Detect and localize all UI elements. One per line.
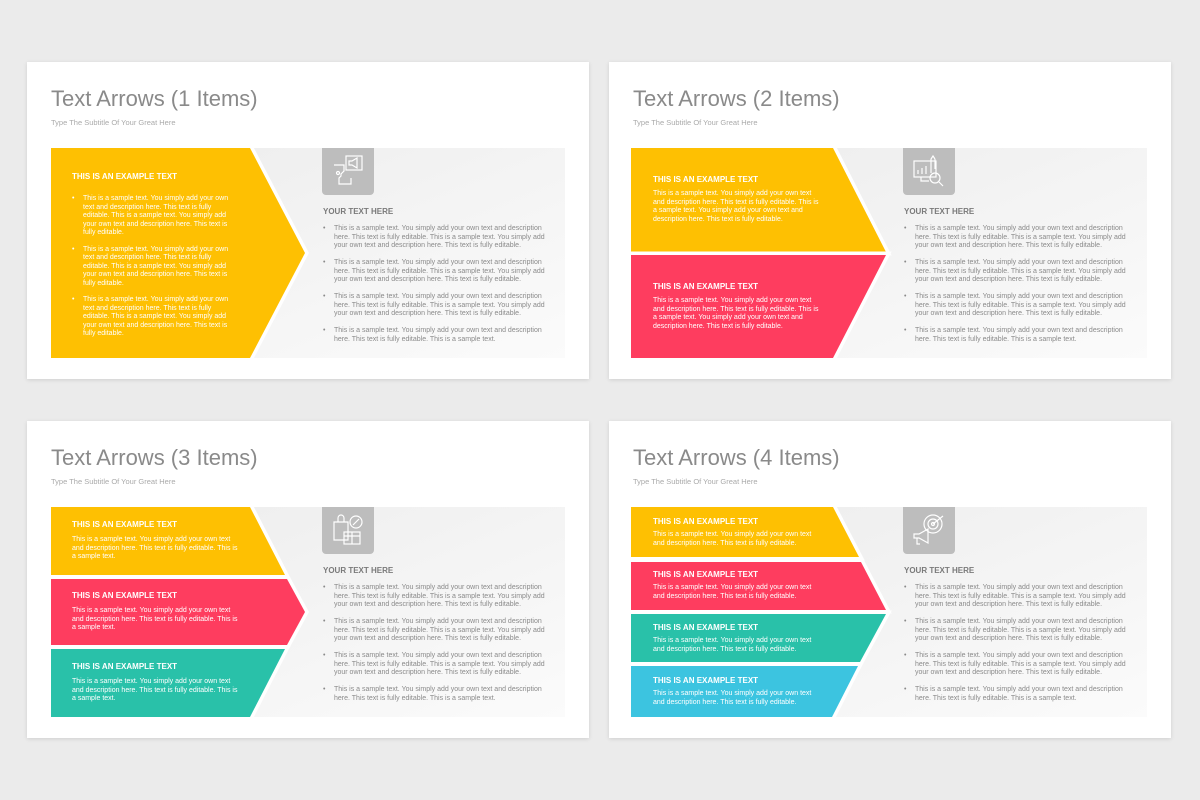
icon: analytics monitor	[903, 148, 955, 195]
right bullet list: This is a sample text. You simply add your own text and description here. This text is fully editable. This is a sample text.	[334, 686, 542, 702]
left text block: This is a sample text. You simply add your own text and description here. This text is fully editable. This is a sample text. You simply add your own text and description here. This text is fully editable.	[83, 246, 228, 286]
item 2 text: This is a sample text. You simply add your own text and description here. This text is fully editable. This is a sample text.	[72, 607, 238, 631]
left text block: This is a sample text. You simply add your own text and description here. This text is fully editable. This is a sample text. You simply add your own text and description here. This text is fully editable.	[83, 296, 228, 337]
item 1 text	[72, 520, 238, 560]
item 2 text: This is a sample text. You simply add your own text and description here. This text is fully editable. This is a sample text. You simply add your own text and description here. This text is fully editable.	[653, 297, 818, 330]
item 2 text	[653, 282, 818, 330]
arrow shapes	[51, 507, 565, 717]
right bullet list	[323, 584, 545, 702]
card: 3 items	[27, 421, 589, 738]
right bullet list: This is a sample text. You simply add your own text and description here. This text is fully editable. This is a sample text. You simply add your own text and description here. This text is fully editable.	[915, 618, 1126, 642]
right bullet list: This is a sample text. You simply add your own text and description here. This text is fully editable. This is a sample text. You simply add your own text and description here. This text is fully editable.	[915, 225, 1126, 249]
right heading: YOUR TEXT HERE	[904, 566, 974, 575]
right bullet list	[904, 584, 1126, 702]
item 3 text: This is a sample text. You simply add your own text and description here. This text is fully editable.	[653, 637, 811, 653]
item 2 text	[72, 591, 238, 631]
subtitle: Type The Subtitle Of Your Great Here	[633, 118, 758, 127]
right bullet list: This is a sample text. You simply add your own text and description here. This text is fully editable. This is a sample text. You simply add your own text and description here. This text is fully editable.	[915, 584, 1126, 608]
item 1 text: THIS IS AN EXAMPLE TEXT	[653, 517, 758, 526]
title: Text Arrows (4 Items)	[633, 445, 840, 470]
icon: head with megaphone	[322, 148, 374, 195]
title: Text Arrows (2 Items)	[633, 86, 840, 111]
item 2 text: THIS IS AN EXAMPLE TEXT	[653, 570, 758, 579]
item 4 text	[653, 676, 812, 706]
left text block: THIS IS AN EXAMPLE TEXT	[72, 172, 177, 181]
item 4 text: This is a sample text. You simply add your own text and description here. This text is fully editable.	[653, 690, 811, 706]
item 1 text: This is a sample text. You simply add your own text and description here. This text is fully editable. This is a sample text. You simply add your own text and description here. This text is fully editable.	[653, 190, 818, 223]
right bullet list: This is a sample text. You simply add your own text and description here. This text is fully editable. This is a sample text. You simply add your own text and description here. This text is fully editable.	[334, 293, 545, 317]
right bullet list: This is a sample text. You simply add your own text and description here. This text is fully editable. This is a sample text. You simply add your own text and description here. This text is fully editable.	[334, 618, 545, 642]
card: 2 items	[609, 62, 1171, 379]
arrow shapes	[51, 148, 565, 358]
subtitle: Type The Subtitle Of Your Great Here	[51, 118, 176, 127]
item 3 text	[653, 623, 812, 653]
item 3 text: This is a sample text. You simply add your own text and description here. This text is fully editable. This is a sample text.	[72, 678, 238, 702]
item 4 text: THIS IS AN EXAMPLE TEXT	[653, 676, 758, 685]
item 2 text	[653, 570, 812, 600]
right bullet list: This is a sample text. You simply add your own text and description here. This text is fully editable. This is a sample text. You simply add your own text and description here. This text is fully editable.	[915, 652, 1126, 676]
right bullet list: This is a sample text. You simply add your own text and description here. This text is fully editable. This is a sample text. You simply add your own text and description here. This text is fully editable.	[915, 293, 1126, 317]
item 1 text: THIS IS AN EXAMPLE TEXT	[653, 175, 758, 184]
item 1 text	[653, 517, 812, 547]
item 3 text	[72, 662, 238, 702]
card: 4 items	[609, 421, 1171, 738]
item 1 text: This is a sample text. You simply add your own text and description here. This text is fully editable. This is a sample text.	[72, 536, 238, 560]
item 3 text: THIS IS AN EXAMPLE TEXT	[72, 662, 177, 671]
title: Text Arrows (1 Items)	[51, 86, 258, 111]
right bullet list: This is a sample text. You simply add your own text and description here. This text is fully editable. This is a sample text. You simply add your own text and description here. This text is fully editable.	[334, 652, 545, 676]
item 1 text	[653, 175, 818, 223]
right bullet list	[323, 224, 545, 342]
item 2 text: THIS IS AN EXAMPLE TEXT	[653, 282, 758, 291]
right bullet list: This is a sample text. You simply add your own text and description here. This text is fully editable. This is a sample text. You simply add your own text and description here. This text is fully editable.	[334, 225, 545, 249]
item 1 text: This is a sample text. You simply add your own text and description here. This text is fully editable.	[653, 531, 811, 547]
left text block	[72, 172, 228, 337]
subtitle: Type The Subtitle Of Your Great Here	[51, 477, 176, 486]
right bullet list: This is a sample text. You simply add your own text and description here. This text is fully editable. This is a sample text.	[334, 327, 542, 342]
card: 1 item	[27, 62, 589, 379]
right bullet list	[904, 224, 1126, 342]
right heading: YOUR TEXT HERE	[323, 566, 393, 575]
icon: shopping bag gift	[322, 507, 374, 554]
icon: target with megaphone	[903, 507, 955, 554]
subtitle: Type The Subtitle Of Your Great Here	[633, 477, 758, 486]
left text block: This is a sample text. You simply add your own text and description here. This text is fully editable. This is a sample text. You simply add your own text and description here. This text is fully editable.	[83, 195, 228, 236]
right bullet list: This is a sample text. You simply add your own text and description here. This text is fully editable. This is a sample text.	[915, 686, 1123, 702]
right heading: YOUR TEXT HERE	[904, 207, 974, 216]
right bullet list: This is a sample text. You simply add your own text and description here. This text is fully editable. This is a sample text. You simply add your own text and description here. This text is fully editable.	[334, 259, 545, 283]
item 2 text: This is a sample text. You simply add your own text and description here. This text is fully editable.	[653, 584, 811, 600]
title: Text Arrows (3 Items)	[51, 445, 258, 470]
arrow shapes	[631, 507, 1147, 717]
right bullet list: This is a sample text. You simply add your own text and description here. This text is fully editable. This is a sample text. You simply add your own text and description here. This text is fully editable.	[915, 259, 1126, 283]
item 3 text: THIS IS AN EXAMPLE TEXT	[653, 623, 758, 632]
right heading: YOUR TEXT HERE	[323, 207, 393, 216]
right bullet list: This is a sample text. You simply add your own text and description here. This text is fully editable. This is a sample text. You simply add your own text and description here. This text is fully editable.	[334, 584, 545, 608]
item 1 text: THIS IS AN EXAMPLE TEXT	[72, 520, 177, 529]
right bullet list: This is a sample text. You simply add your own text and description here. This text is fully editable. This is a sample text.	[915, 327, 1123, 342]
item 2 text: THIS IS AN EXAMPLE TEXT	[72, 591, 177, 600]
arrow shapes	[631, 148, 1147, 358]
